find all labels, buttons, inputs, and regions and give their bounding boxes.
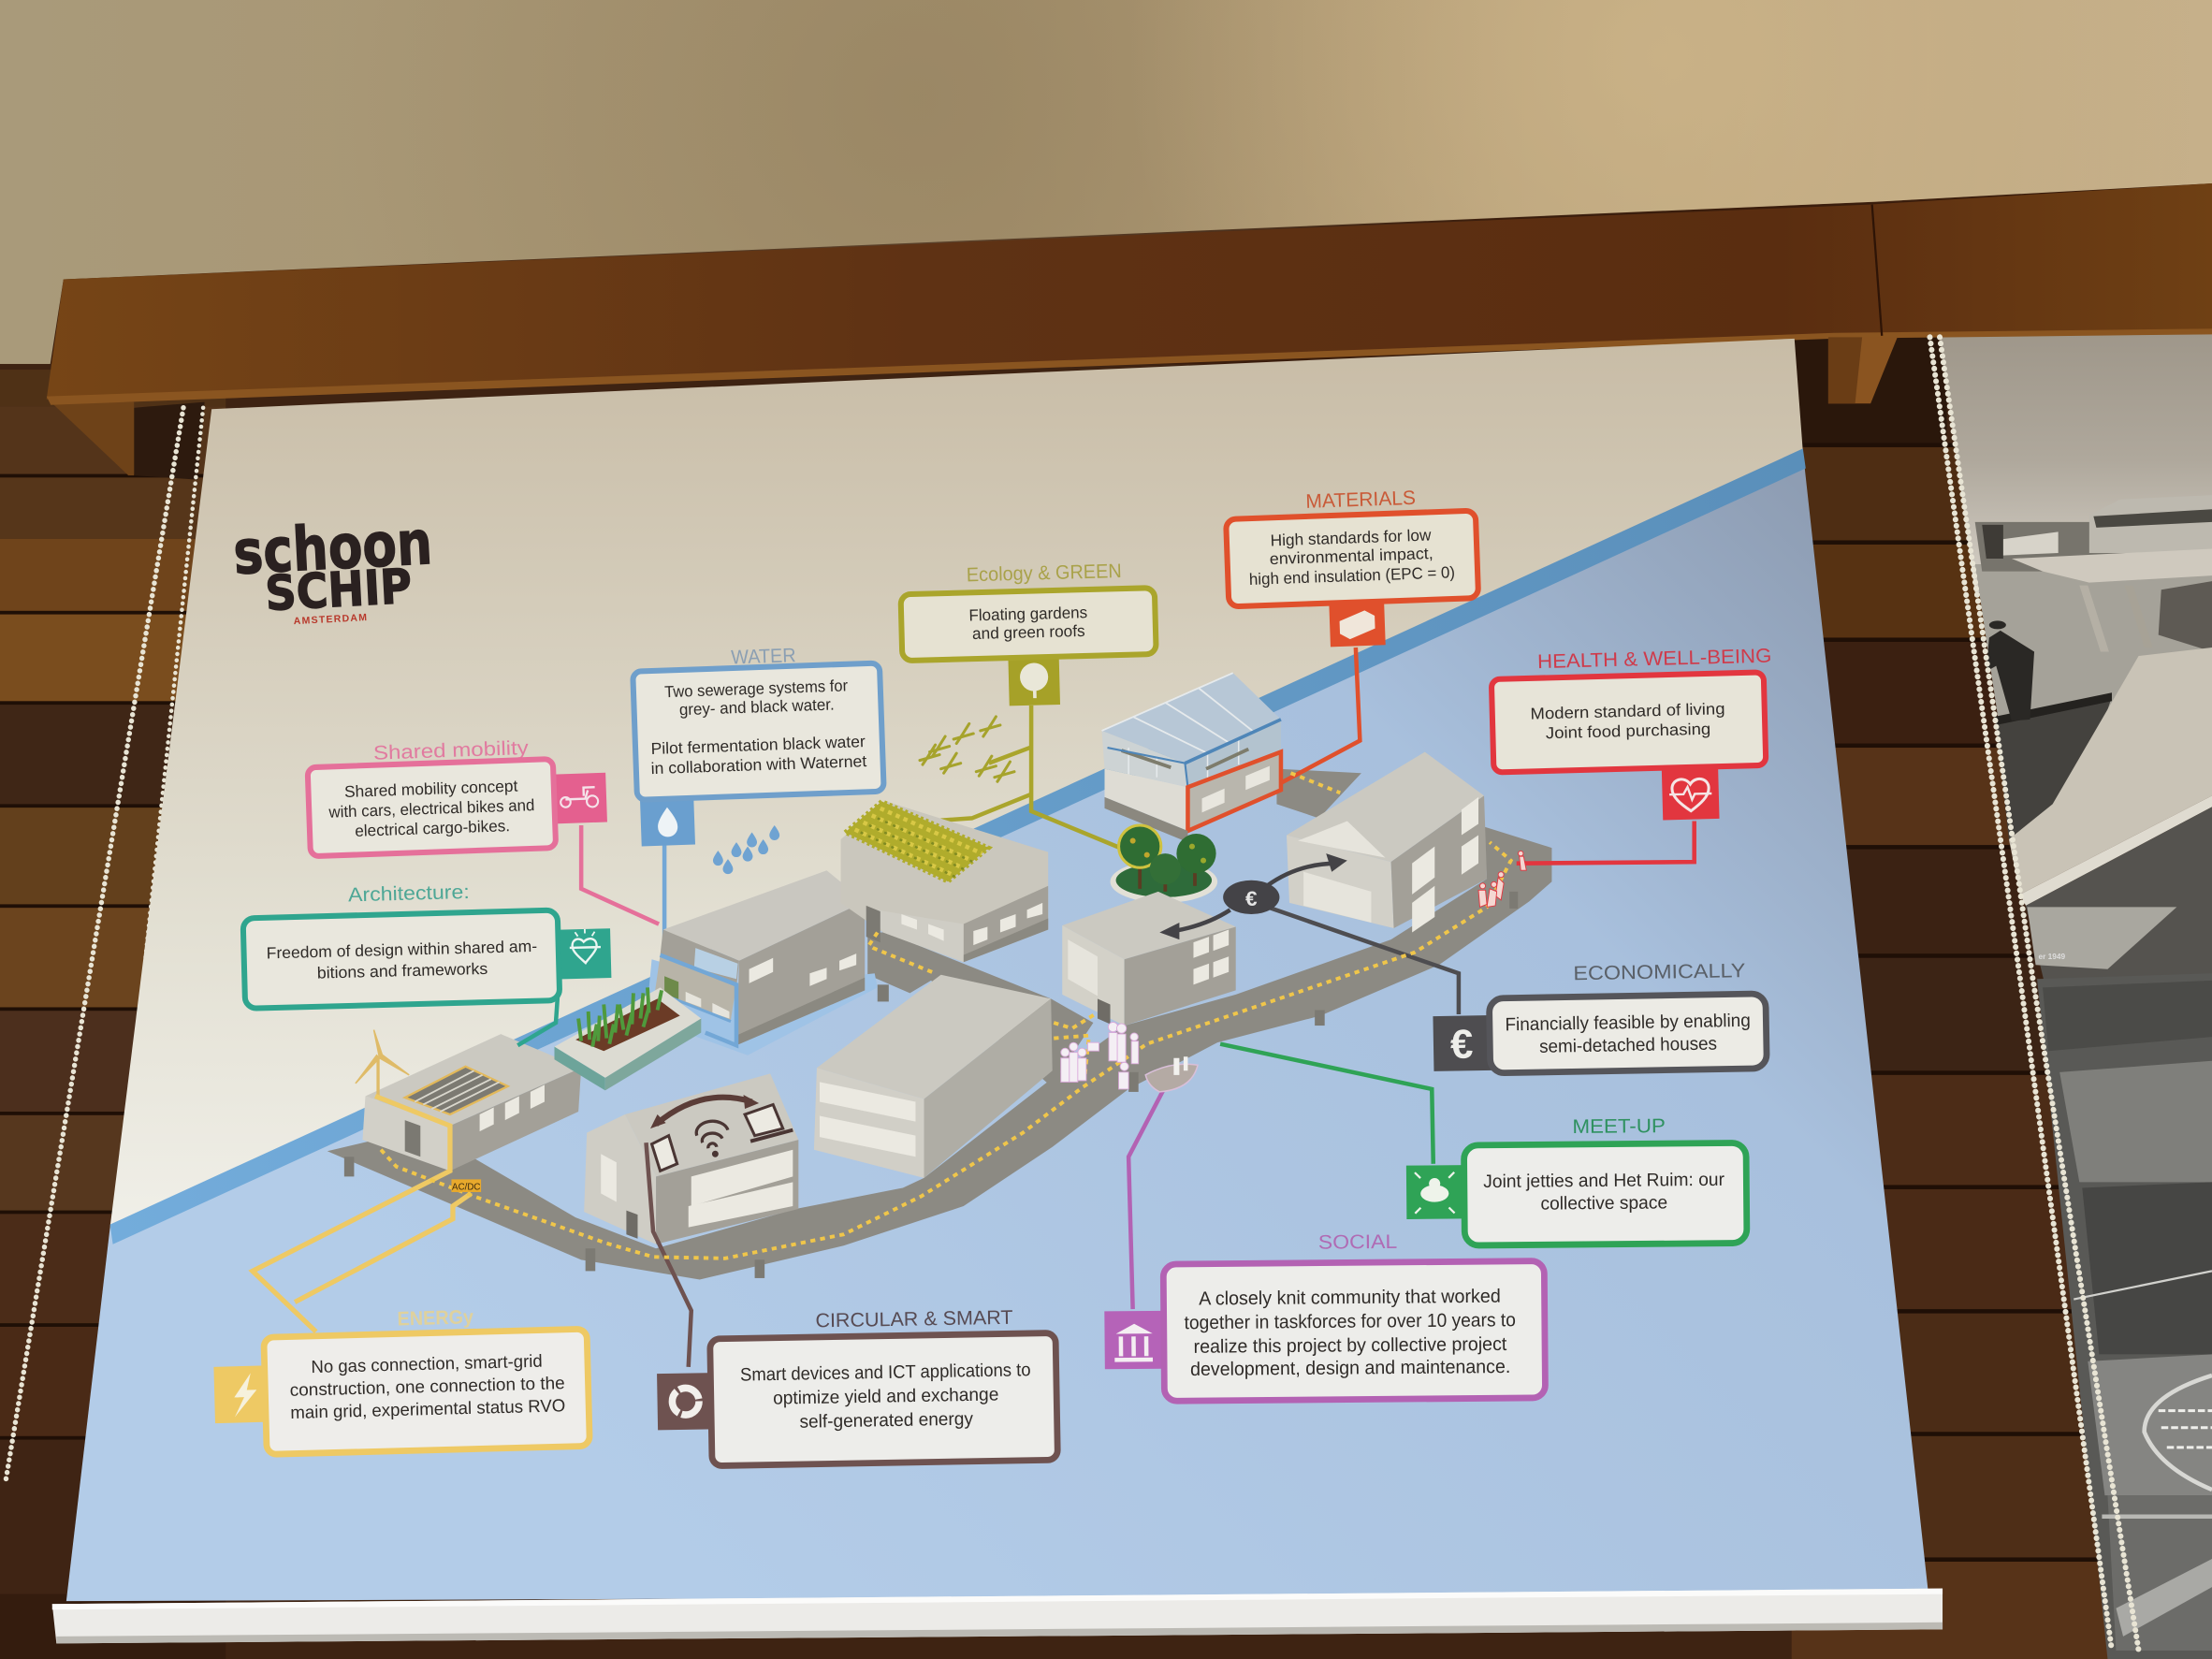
- text: [1184, 1287, 1516, 1380]
- icon: circular arrows: [657, 1373, 714, 1430]
- boat: [1145, 1056, 1198, 1092]
- logo: Schoonschip Amsterdam: AMSTERDAM: [293, 612, 368, 627]
- icon: tree: [1008, 657, 1060, 706]
- text: Shared mobility concept: [344, 777, 518, 801]
- panel: circular and smart: [656, 1306, 1057, 1467]
- heading: water: WATER: [731, 645, 796, 669]
- text: [648, 676, 867, 778]
- text: Joint jetties and Het Ruim: our: [1483, 1170, 1725, 1192]
- icon: heart with pencil: [557, 928, 611, 979]
- icon: devices and wifi: [650, 1095, 793, 1171]
- text: self-generated energy: [799, 1409, 973, 1433]
- text: Financially feasible by enabling: [1505, 1011, 1751, 1035]
- heading: health and well-being: HEALTH & WELL-BEING: [1537, 646, 1772, 673]
- text: No gas connection, smart-grid: [311, 1351, 543, 1376]
- icon: lightning bolt: [213, 1365, 271, 1423]
- text: [1530, 699, 1725, 743]
- text: construction, one connection to the: [289, 1373, 565, 1400]
- text: Pilot fermentation black water: [650, 732, 866, 758]
- people on the jetty: [1061, 1022, 1139, 1089]
- text: environmental impact,: [1269, 544, 1433, 568]
- runners: [1478, 851, 1526, 907]
- text: collective space: [1540, 1192, 1667, 1215]
- roller bead chains: [6, 337, 2139, 1651]
- photo poster on the right: [1940, 327, 2212, 1659]
- text: semi-detached houses: [1539, 1034, 1717, 1057]
- AC/DC label: AC/DC: [452, 1183, 480, 1193]
- text: Joint food purchasing: [1546, 720, 1710, 742]
- text: high end insulation (EPC = 0): [1249, 562, 1455, 589]
- panel: economically: [1432, 960, 1767, 1074]
- heading: shared mobility: Shared mobility: [373, 737, 530, 764]
- text: [1505, 1011, 1751, 1057]
- wooden slat wall: [0, 337, 2212, 1659]
- heading: architecture: Architecture:: [348, 881, 470, 906]
- floating garden reed bed: [555, 987, 701, 1090]
- logo: Schoonschip Amsterdam: SCHIP: [264, 559, 414, 622]
- panel: materials: [1225, 486, 1480, 650]
- economic arrows and icon: [1159, 853, 1347, 939]
- logo: Schoonschip Amsterdam: schoon: [232, 508, 434, 589]
- heading: circular and smart: CIRCULAR & SMART: [815, 1307, 1013, 1332]
- panel: health and well-being: [1491, 646, 1776, 824]
- icon: euro: €: [1450, 1022, 1474, 1068]
- text: and green roofs: [972, 621, 1085, 643]
- poster sheet: [66, 339, 1928, 1601]
- floating garden with trees: [1111, 825, 1217, 903]
- icon: cargo bike: [553, 773, 607, 823]
- text: Modern standard of living: [1530, 699, 1725, 723]
- dashed energy path on the jetty: [381, 773, 1511, 1259]
- text: A closely knit community that worked: [1199, 1287, 1501, 1310]
- icon: wind turbine: [356, 1030, 409, 1096]
- panel: ecology and green: [900, 560, 1157, 708]
- text: together in taskforces for over 10 years to: [1185, 1310, 1516, 1333]
- text: in collaboration with Waternet: [650, 751, 867, 778]
- text: realize this project by collective project: [1194, 1334, 1507, 1358]
- text: [327, 776, 535, 841]
- heading: materials: MATERIALS: [1305, 488, 1416, 513]
- building: greenhouse: [1101, 648, 1360, 842]
- building: green roof house: [841, 801, 1048, 962]
- heading: energy: ENERGy: [397, 1306, 474, 1330]
- icon: euro: [1433, 1015, 1492, 1071]
- building: smart house: [584, 1073, 798, 1244]
- panel: social: [1104, 1230, 1546, 1402]
- heading: economically: ECONOMICALLY: [1573, 960, 1746, 984]
- building: long white-banded house: [814, 975, 1053, 1178]
- text: optimize yield and exchange: [773, 1384, 999, 1409]
- text: [266, 937, 538, 983]
- birds: [920, 717, 1014, 781]
- jetty walkway: [327, 769, 1551, 1279]
- text: [1247, 525, 1455, 589]
- heading: social: SOCIAL: [1318, 1231, 1398, 1254]
- building: water house: [647, 870, 878, 1055]
- panel: water: [632, 642, 885, 847]
- photo figure: [1986, 620, 2034, 720]
- text: Two sewerage systems for: [664, 676, 849, 701]
- panel: shared mobility: [307, 735, 608, 856]
- panel: meet-up: [1405, 1114, 1747, 1246]
- connector lines over buildings: [253, 821, 1695, 1367]
- icon: brick: [1329, 602, 1386, 647]
- ceiling: [0, 0, 2212, 370]
- rain drops: [713, 825, 779, 874]
- text: [740, 1360, 1032, 1433]
- text: with cars, electrical bikes and: [327, 795, 535, 822]
- text: bitions and frameworks: [317, 959, 488, 982]
- icon: institution building: [1104, 1311, 1164, 1369]
- panel: energy: [212, 1303, 589, 1456]
- logo: Schoonschip Amsterdam: [232, 508, 436, 630]
- text: [1483, 1170, 1725, 1215]
- building: semi-detached house centre: [1062, 892, 1236, 1026]
- text: electrical cargo-bikes.: [355, 816, 510, 840]
- icon: water drop: [640, 798, 695, 846]
- icon: group gathering: [1406, 1165, 1464, 1219]
- text: [289, 1350, 566, 1422]
- text: development, design and maintenance.: [1190, 1357, 1510, 1380]
- text: Freedom of design within shared am-: [266, 937, 537, 962]
- text: Smart devices and ICT applications to: [740, 1360, 1031, 1386]
- text: [968, 603, 1088, 643]
- heading: ecology and green: Ecology & GREEN: [967, 560, 1122, 586]
- text: main grid, experimental status RVO: [290, 1395, 566, 1422]
- wooden pelmet beam: [47, 183, 2212, 480]
- heading: meet-up: MEET-UP: [1572, 1115, 1666, 1138]
- poster roller bar: [52, 1589, 1943, 1643]
- connector lines from panels to scene: [581, 706, 1120, 955]
- economic arrows and icon: €: [1245, 887, 1258, 910]
- building: energy house with solar panel: [356, 1030, 581, 1171]
- icon: heart with pulse: [1662, 768, 1720, 821]
- building: gabled house right: [1287, 752, 1487, 933]
- panel: architecture: [242, 878, 612, 1009]
- text: Floating gardens: [968, 603, 1088, 625]
- text: High standards for low: [1270, 525, 1432, 549]
- photo caption: er 1949: [2039, 952, 2066, 961]
- text: grey- and black water.: [679, 694, 835, 719]
